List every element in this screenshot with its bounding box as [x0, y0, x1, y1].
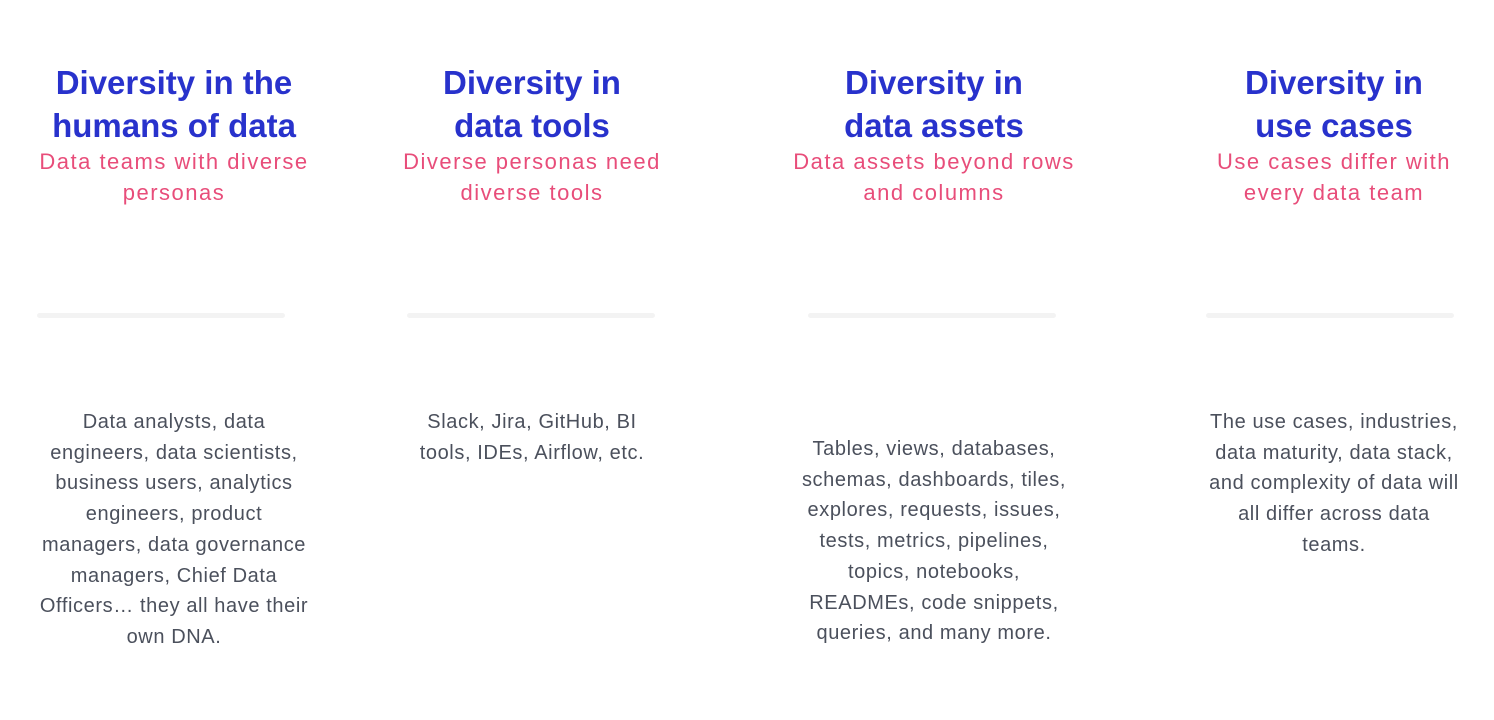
subtitle: diverse tools	[460, 180, 604, 205]
title: Diversity in	[1245, 64, 1423, 101]
title: data tools	[454, 107, 610, 144]
subtitle	[403, 149, 661, 205]
body text: tests, metrics, pipelines,	[819, 530, 1048, 552]
title: use cases	[1255, 107, 1413, 144]
divider	[1206, 313, 1454, 318]
title	[1245, 64, 1423, 144]
body text: Slack, Jira, GitHub, BI	[427, 411, 637, 433]
subtitle: Data assets beyond rows	[793, 149, 1075, 174]
body text: data maturity, data stack,	[1215, 442, 1453, 464]
body text: own DNA.	[127, 626, 221, 648]
column: humans of data	[39, 64, 309, 648]
column: data assets	[793, 64, 1075, 644]
subtitle	[39, 149, 309, 205]
body text	[1209, 411, 1459, 556]
title: humans of data	[52, 107, 296, 144]
title	[844, 64, 1024, 144]
title	[52, 64, 296, 144]
title: Diversity in	[443, 64, 621, 101]
title: Diversity in	[845, 64, 1023, 101]
body text: queries, and many more.	[816, 622, 1052, 644]
body text	[802, 438, 1066, 644]
body text: topics, notebooks,	[848, 561, 1020, 583]
subtitle: Diverse personas need	[403, 149, 661, 174]
body text: teams.	[1302, 534, 1366, 556]
body text: business users, analytics	[55, 472, 293, 494]
body text: Tables, views, databases,	[813, 438, 1055, 460]
title: data assets	[844, 107, 1024, 144]
divider	[407, 313, 655, 318]
body text: tools, IDEs, Airflow, etc.	[420, 442, 644, 464]
subtitle: every data team	[1244, 180, 1424, 205]
body text: READMEs, code snippets,	[809, 592, 1059, 614]
column: data tools	[403, 64, 661, 464]
divider	[808, 313, 1056, 318]
column: use cases	[1209, 64, 1459, 556]
body text: The use cases, industries,	[1210, 411, 1458, 433]
subtitle	[1217, 149, 1451, 205]
subtitle: personas	[123, 180, 225, 205]
body text: Officers… they all have their	[40, 595, 308, 617]
subtitle	[793, 149, 1075, 205]
subtitle: and columns	[863, 180, 1005, 205]
body text: all differ across data	[1238, 503, 1430, 525]
body text: explores, requests, issues,	[808, 499, 1060, 521]
title: Diversity in the	[56, 64, 292, 101]
title	[443, 64, 621, 144]
body text: managers, Chief Data	[71, 565, 277, 587]
subtitle: Use cases differ with	[1217, 149, 1451, 174]
body text: schemas, dashboards, tiles,	[802, 469, 1066, 491]
body text: engineers, data scientists,	[50, 442, 298, 464]
body text: managers, data governance	[42, 534, 306, 556]
body text	[40, 411, 308, 648]
body text	[420, 411, 644, 464]
body text: and complexity of data will	[1209, 472, 1459, 494]
body text: Data analysts, data	[83, 411, 265, 433]
divider	[37, 313, 285, 318]
subtitle: Data teams with diverse	[39, 149, 309, 174]
body text: engineers, product	[86, 503, 262, 525]
